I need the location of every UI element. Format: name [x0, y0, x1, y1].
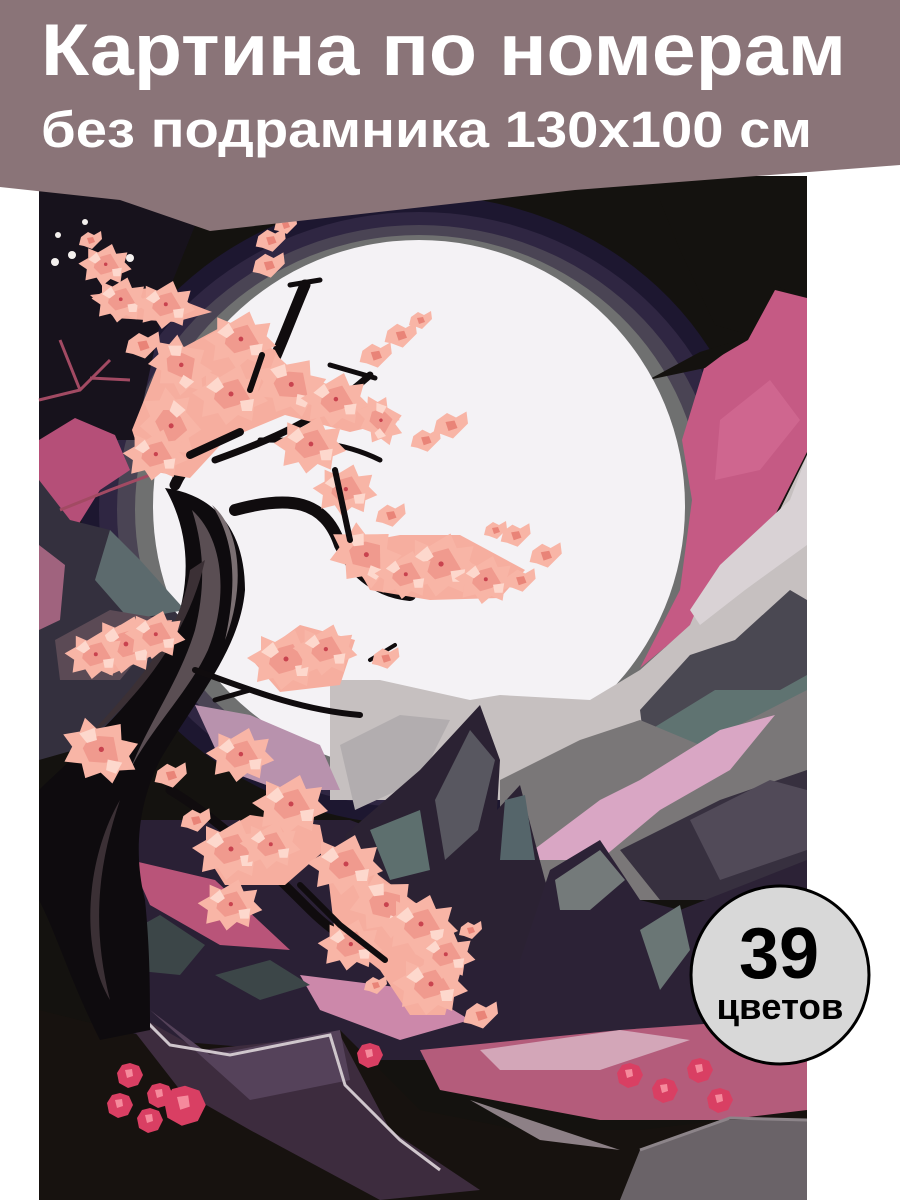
thin pink branches — [39, 340, 150, 510]
valley lower — [420, 1020, 807, 1120]
far mountains right — [640, 590, 807, 790]
badge: 39 colours — [691, 886, 869, 1064]
tree branches — [170, 280, 410, 970]
root highlights — [130, 1005, 807, 1170]
central mountain — [345, 705, 570, 960]
right foreground mountain — [520, 840, 807, 1060]
blossom masses — [72, 288, 525, 1015]
pink valley — [130, 860, 290, 950]
lower mid dark base — [110, 820, 620, 1060]
painting background — [39, 176, 807, 1200]
painting — [39, 176, 807, 1200]
white buds top left — [51, 219, 134, 266]
title: Картина по номерам — [41, 10, 846, 91]
header banner — [0, 0, 900, 231]
badge: 39 colours: 39 — [739, 914, 819, 994]
dark left side — [39, 176, 215, 440]
tree trunk — [39, 488, 245, 1040]
left hills left of tree — [39, 480, 200, 760]
foreground ground — [39, 1010, 807, 1200]
green foliage — [115, 915, 310, 1000]
moon — [153, 240, 685, 772]
badge: 39 colours: цветов — [716, 986, 844, 1027]
halo rings around moon — [81, 195, 757, 825]
pink splash right — [640, 290, 807, 668]
subtitle: без подрамника 130х100 см — [41, 101, 812, 158]
branch accents over blossoms — [190, 355, 385, 960]
dark top right corner — [650, 176, 807, 335]
pink splash left — [39, 418, 130, 560]
clouds grey band — [330, 455, 807, 800]
pink flowers lower — [107, 1043, 733, 1133]
cherry blossoms — [52, 216, 562, 1028]
lilac mist mid left — [195, 705, 340, 790]
